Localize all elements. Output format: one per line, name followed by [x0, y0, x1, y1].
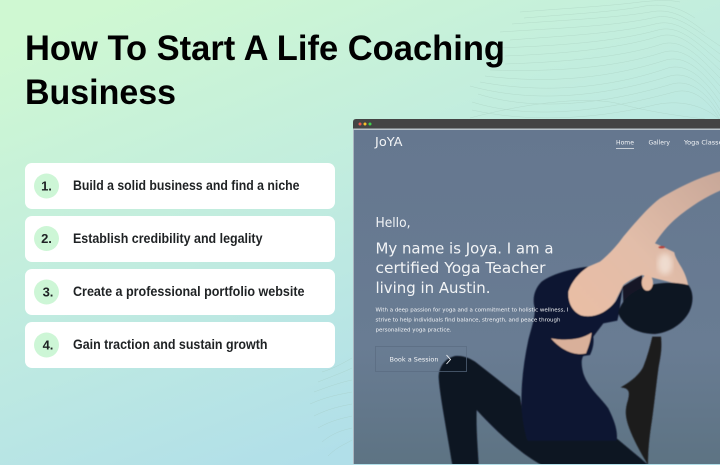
step 3 card	[25, 269, 335, 315]
yoga figure: highlight on cheek	[658, 253, 672, 275]
logo: JoYA	[374, 135, 403, 149]
step 3 card: 3.	[43, 284, 53, 300]
hero greeting: Hello,	[376, 215, 410, 231]
decorative wave lines	[310, 0, 720, 456]
navigation	[616, 138, 720, 149]
step 2 card: Establish credibility and legality	[73, 231, 263, 246]
hero paragraph: With a deep passion for yoga and a commitment to holistic wellness, I	[376, 308, 569, 314]
step 4 card: Gain traction and sustain growth	[73, 337, 268, 352]
yoga figure: neck hair	[623, 275, 645, 303]
yoga figure: ear	[642, 275, 653, 291]
yoga figure: lips	[658, 246, 665, 249]
step 2 card	[25, 216, 335, 262]
navigation: Gallery	[648, 138, 670, 146]
step 4 card	[25, 322, 335, 368]
yoga figure: legs	[439, 356, 648, 465]
title: How To Start A Life Coaching	[25, 29, 505, 68]
step 1 card	[25, 163, 335, 209]
browser title bar	[353, 119, 720, 130]
title	[25, 29, 505, 112]
hero headline: certified Yoga Teacher	[376, 259, 546, 277]
hero photo	[353, 130, 720, 465]
website screenshot	[353, 119, 720, 465]
yoga figure: hair	[618, 283, 692, 334]
hero paragraph: personalized yoga practice.	[376, 328, 452, 334]
book a session button	[376, 346, 466, 372]
book a session button: Book a Session	[390, 356, 438, 364]
yoga figure: ponytail	[621, 337, 661, 465]
hero paragraph: strive to help individuals find balance, strength, and peace through	[376, 318, 561, 324]
title: Business	[25, 73, 176, 112]
navigation: Home	[616, 138, 634, 146]
hero paragraph	[376, 308, 569, 334]
step 1 card: Build a solid business and find a niche	[73, 178, 300, 193]
step 1 card: 1.	[41, 178, 52, 194]
yoga figure: torso	[521, 267, 623, 441]
list of steps	[25, 163, 335, 368]
step 3 card: Create a professional portfolio website	[73, 284, 305, 299]
hero headline: living in Austin.	[376, 279, 490, 297]
yoga figure: arm, shoulder and face	[568, 171, 720, 316]
step 2 card: 2.	[41, 231, 52, 246]
hero headline: My name is Joya. I am a	[376, 240, 554, 258]
step 4 card: 4.	[43, 338, 53, 352]
yoga figure: midriff	[551, 333, 592, 354]
hero headline	[376, 240, 554, 297]
